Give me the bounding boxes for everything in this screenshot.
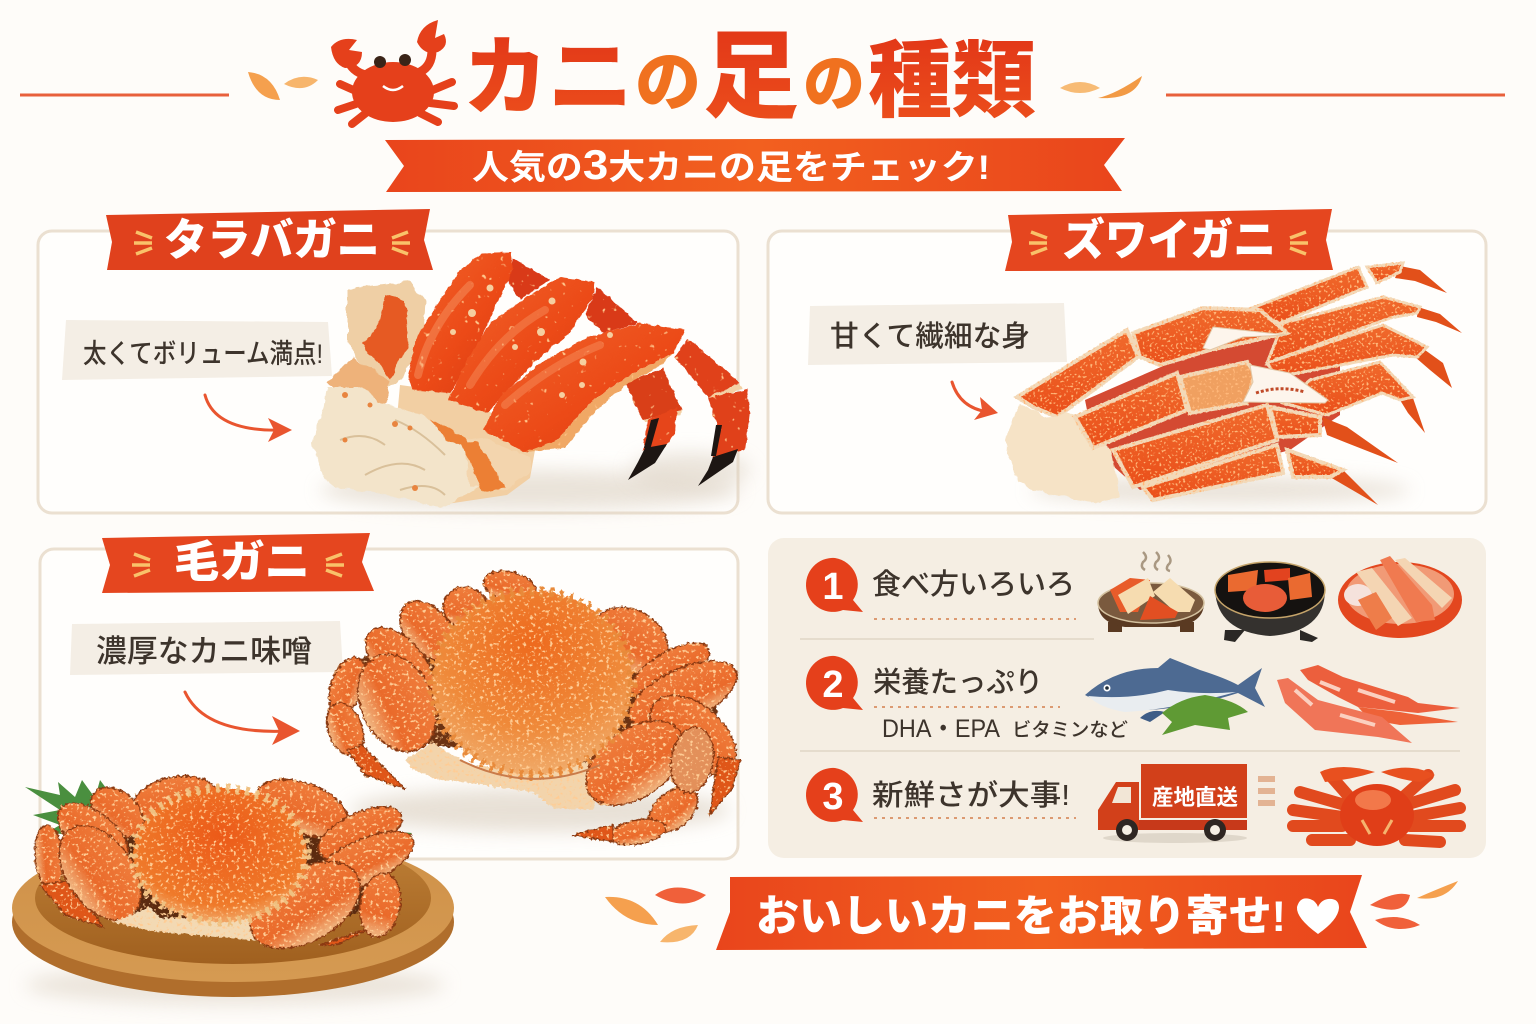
bottom banner: おいしいカニをお取り寄せ! — [756, 893, 1286, 941]
claw white 2 — [1243, 365, 1328, 403]
title text: 足 — [703, 24, 799, 131]
callout: 太くてボリューム満点: 太くてボリューム満点! — [83, 339, 323, 369]
icon: heart — [1297, 898, 1339, 934]
meat ends — [1007, 403, 1120, 503]
number badge 3 — [806, 768, 863, 822]
heading ribbon: 毛ガニ — [102, 533, 374, 593]
title text: 種類 — [868, 34, 1036, 128]
tips — [1322, 266, 1462, 505]
callout: 濃厚なカニ味噌: 濃厚なカニ味噌 — [96, 634, 312, 669]
leg highlights — [418, 285, 470, 375]
icon: steamed crab — [1098, 552, 1204, 632]
callout: 甘くて繊細な身 — [808, 303, 1067, 365]
illustration: hair crab — [320, 566, 751, 849]
title text: の — [803, 50, 865, 119]
heading ribbon: タラバガニ: タラバガニ — [164, 216, 380, 265]
icon: leaves right — [1060, 76, 1142, 98]
wooden plate — [12, 832, 454, 997]
callout: 濃厚なカニ味噌 — [70, 621, 343, 675]
back leg segments — [508, 258, 750, 458]
main legs — [408, 252, 685, 453]
icon: grill — [1215, 562, 1325, 642]
number badge 2: 2 — [822, 664, 844, 706]
nutrients caption: ビタミンなど — [1012, 719, 1128, 741]
arrow — [205, 395, 292, 442]
upper arm — [1017, 308, 1287, 417]
row 1: 食べ方いろいろ — [806, 552, 1462, 642]
illustration: crab on wooden plate — [12, 768, 454, 1005]
number badge 1: 1 — [822, 566, 844, 608]
shoulder meat — [327, 282, 425, 410]
leaves — [25, 780, 412, 842]
title block — [20, 20, 1505, 131]
nutrients caption: DHA・EPA — [882, 715, 1000, 743]
heading ribbon: ズワイガニ — [1005, 209, 1333, 271]
title text: カニ — [463, 30, 633, 126]
icon: crab legs — [1277, 665, 1460, 743]
nutrients caption — [882, 715, 1128, 743]
row 1: 食べ方いろいろ: 食べ方いろいろ — [872, 568, 1075, 601]
claw tips — [628, 418, 738, 486]
icon: leaves bottom right — [1370, 881, 1458, 929]
claw white 1 — [1203, 327, 1287, 350]
subtitle ribbon — [385, 138, 1125, 192]
panel: tips — [768, 538, 1486, 858]
heading ribbon: タラバガニ — [106, 209, 433, 270]
joint backing — [395, 385, 535, 505]
spots — [450, 284, 613, 398]
meat — [312, 387, 530, 507]
icon: leaves left — [248, 72, 318, 100]
number badge 3: 3 — [822, 776, 844, 818]
bottom banner — [716, 875, 1367, 950]
title text — [463, 24, 1036, 131]
title text: の — [635, 45, 701, 119]
icon: truck — [1098, 764, 1275, 843]
icon: leaves bottom left — [605, 888, 706, 942]
row 2: 栄養たっぷり — [806, 656, 1460, 743]
illustration: snow crab legs — [1007, 263, 1462, 505]
callout: 太くてボリューム満点 — [62, 320, 332, 380]
number badge 2 — [806, 656, 863, 710]
row 3: 新鮮さが大事: 新鮮さが大事! — [872, 779, 1070, 812]
far legs — [1247, 263, 1427, 415]
icon: red crab — [1293, 767, 1460, 846]
icon: fish — [1085, 658, 1265, 735]
panel: 毛ガニ — [40, 533, 751, 859]
panel: タラバガニ — [38, 209, 750, 513]
callout: 甘くて繊細な身: 甘くて繊細な身 — [830, 320, 1030, 353]
icon: sashimi plate — [1338, 556, 1462, 638]
near legs — [1075, 362, 1343, 500]
panel: ズワイガニ — [768, 209, 1486, 513]
subtitle ribbon: 人気の3大カニの足をチェック! — [472, 141, 990, 188]
number badge 1 — [806, 558, 863, 612]
row 2: 栄養たっぷり: 栄養たっぷり — [873, 666, 1043, 699]
row 3: 新鮮さが大事 — [806, 764, 1460, 846]
icon: crab — [331, 20, 454, 124]
illustration: king crab legs — [312, 252, 750, 510]
heading ribbon: ズワイガニ: ズワイガニ — [1062, 215, 1276, 265]
arrow — [952, 382, 998, 420]
heading ribbon: 毛ガニ: 毛ガニ — [174, 538, 310, 587]
icon: truck: 産地直送 — [1152, 785, 1238, 810]
arrow — [185, 692, 300, 745]
